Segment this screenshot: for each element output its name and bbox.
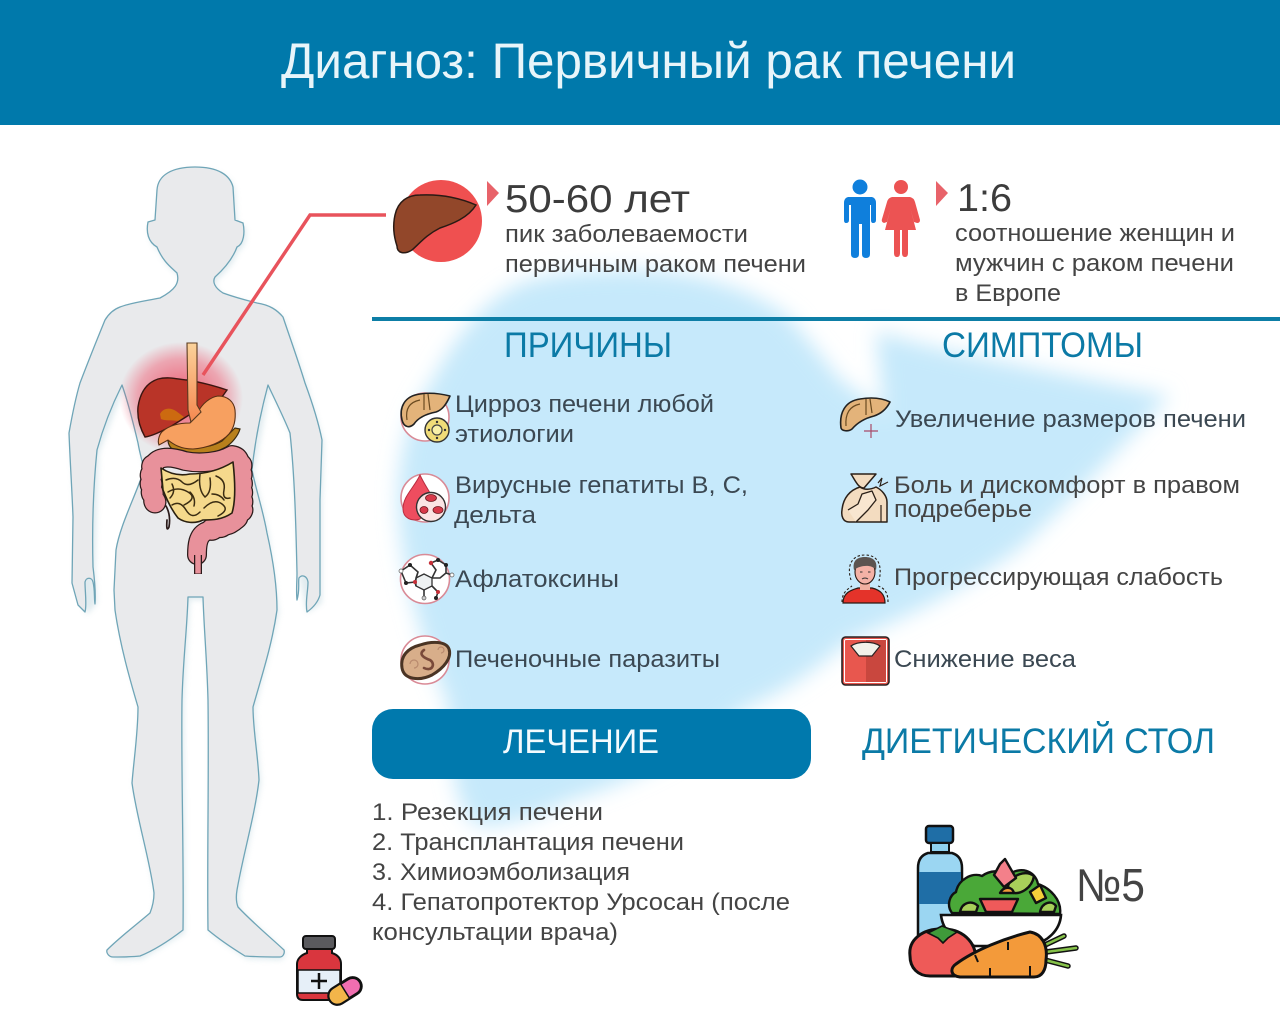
text: pain: подреберье xyxy=(894,496,1032,523)
treatment list: консультации врача) xyxy=(372,919,618,946)
icon: blood drop with cells xyxy=(401,474,449,522)
text: viral hepatitis: дельта xyxy=(454,502,537,529)
text: parasites: Печеночные паразиты xyxy=(455,646,720,673)
text: cirrhosis: Цирроз печени любой xyxy=(455,391,714,418)
text: viral hepatitis xyxy=(454,472,748,529)
icon: healthy food xyxy=(910,826,1076,977)
text: cirrhosis: этиологии xyxy=(455,421,574,448)
stat: age peak: пик заболеваемости xyxy=(505,221,748,248)
icon: weak person xyxy=(842,555,888,603)
organs xyxy=(119,342,243,574)
red glow xyxy=(119,342,243,454)
treatment list: 2. Трансплантация печени xyxy=(372,829,684,856)
icon: man and woman xyxy=(844,180,920,258)
age marker xyxy=(487,181,499,206)
heading: symptoms: СИМПТОМЫ xyxy=(942,326,1143,365)
treatment list xyxy=(372,799,790,946)
treatment button xyxy=(372,709,811,779)
gallbladder xyxy=(160,409,184,421)
stat: age peak xyxy=(505,178,806,278)
icon: liver in red circle xyxy=(394,180,482,262)
water bottle xyxy=(918,826,962,943)
text: liver enlargement: Увеличение размеров печени xyxy=(895,406,1246,433)
tomato xyxy=(910,926,975,976)
header banner xyxy=(0,0,1280,125)
large intestine xyxy=(151,455,242,574)
icon: enlarged liver xyxy=(841,398,890,438)
icon: scale xyxy=(842,637,889,685)
body silhouette xyxy=(69,167,324,960)
treatment list: 1. Резекция печени xyxy=(372,799,603,826)
text: aflatoxins: Афлатоксины xyxy=(455,566,619,593)
stat: ratio: в Европе xyxy=(955,280,1061,307)
callout line xyxy=(203,215,386,375)
title: Диагноз: Первичный рак печени xyxy=(281,33,1016,89)
heading: diet table: ДИЕТИЧЕСКИЙ СТОЛ xyxy=(862,721,1215,761)
treatment list: 4. Гепатопротектор Урсосан (после xyxy=(372,889,790,916)
treatment button: ЛЕЧЕНИЕ xyxy=(503,723,659,761)
text: weight loss: Снижение веса xyxy=(894,646,1077,673)
stat: ratio: соотношение женщин и xyxy=(955,220,1235,247)
ratio marker xyxy=(936,181,948,206)
icon: cirrhosis xyxy=(401,393,450,442)
stat: age peak: первичным раком печени xyxy=(505,251,806,278)
text: weakness: Прогрессирующая слабость xyxy=(894,564,1223,591)
salad xyxy=(949,859,1060,914)
stat: ratio xyxy=(955,177,1235,307)
icon: medicine bottle and pill xyxy=(297,936,365,1008)
stat: age peak: 50-60 лет xyxy=(505,178,690,221)
stat: ratio: мужчин с раком печени xyxy=(955,250,1234,277)
stomach xyxy=(158,396,235,449)
text: cirrhosis xyxy=(455,391,714,448)
text: pain: Боль и дискомфорт в правом xyxy=(894,472,1240,499)
text: viral hepatitis: Вирусные гепатиты В, С, xyxy=(455,472,748,499)
background liver shape xyxy=(398,270,1170,826)
icon: liver parasites xyxy=(401,636,450,684)
treatment list: 3. Химиоэмболизация xyxy=(372,859,630,886)
heading: causes: ПРИЧИНЫ xyxy=(504,326,672,365)
bowl xyxy=(941,915,1061,946)
liver organ xyxy=(138,378,227,437)
esophagus xyxy=(187,343,201,422)
text: pain xyxy=(894,472,1240,523)
carrot xyxy=(952,932,1076,977)
icon: molecule xyxy=(399,554,454,604)
pancreas xyxy=(168,428,240,455)
diet number: №5 xyxy=(1076,859,1145,911)
icon: shoulder pain xyxy=(842,474,888,522)
stat: ratio: 1:6 xyxy=(957,177,1012,220)
small intestine xyxy=(161,462,235,522)
